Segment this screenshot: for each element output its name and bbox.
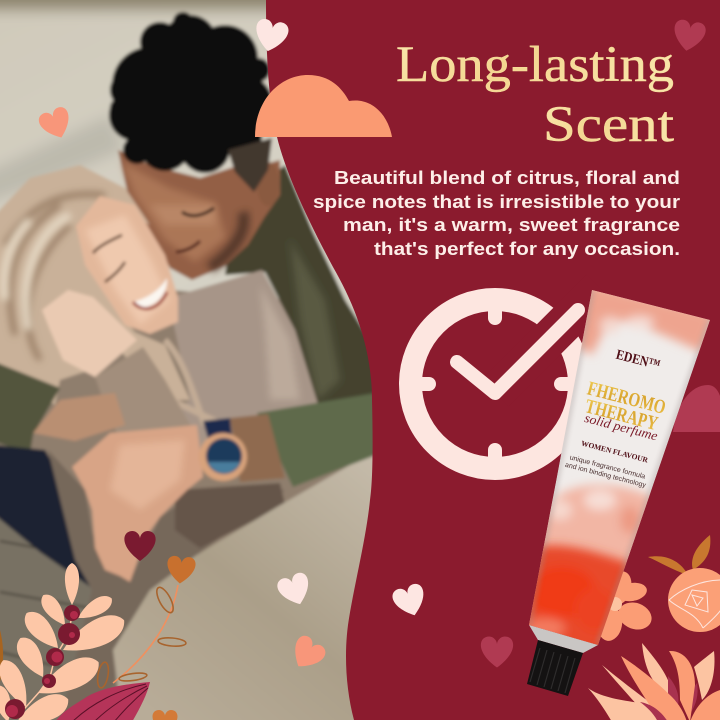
tube flavour: WOMEN FLAVOUR — [580, 439, 650, 465]
floral: bottom right plant — [588, 643, 720, 720]
icon: heart dark on hand — [124, 531, 156, 561]
floral: orange fruit — [648, 535, 720, 632]
description line 2: spice notes that is irresistible to your — [313, 191, 680, 212]
tube body — [529, 290, 710, 645]
tube subtitle: solid perfume — [583, 410, 660, 443]
tube red base — [529, 538, 628, 645]
description text — [313, 167, 680, 259]
photo: man's left forearm — [33, 393, 125, 441]
photo: knit sleeve — [95, 347, 192, 448]
tube name line 2: THERAPY — [583, 395, 660, 435]
tube edge shading — [529, 290, 710, 645]
icon: clock with check mark — [410, 288, 600, 468]
photo: woman's hand — [42, 290, 137, 377]
panel: crimson wave shape — [266, 0, 720, 720]
branch berries — [5, 605, 80, 719]
icon: cloud peach — [255, 75, 392, 137]
icon: cloud pale crimson right — [673, 385, 720, 432]
floral: bottom left outline stem — [96, 585, 186, 689]
photo: man's right forearm — [230, 414, 285, 482]
description line 3: man, it's a warm, sweet fragrance — [343, 214, 680, 235]
tube middle clouds — [525, 485, 655, 572]
stem line — [113, 585, 178, 683]
photo: sweater — [125, 270, 318, 455]
icon: heart cream on pants — [275, 571, 315, 609]
tube top clouds — [580, 290, 710, 358]
floral: bottom left berry branch — [0, 563, 130, 720]
photo: embracing couple — [0, 0, 400, 720]
plant accents back — [668, 676, 698, 714]
plant dark accent — [640, 702, 668, 720]
photo: clothing underlayer — [0, 290, 376, 560]
plant pale leaves back — [642, 643, 672, 697]
check mark cut-out — [495, 288, 600, 393]
flower petals — [595, 569, 655, 643]
tube neck — [529, 625, 598, 653]
tube name line 1: FHEROMO — [585, 378, 668, 419]
icon: heart pale crimson lower — [481, 636, 513, 668]
clock ring — [410, 300, 580, 468]
flower centre — [608, 597, 622, 611]
photo: blurred wall — [0, 0, 400, 720]
icon: heart orange bottom — [153, 710, 177, 720]
photo: jacket — [225, 165, 376, 410]
product: Eden tube — [527, 290, 710, 696]
tube brand: EDEN™ — [614, 348, 662, 374]
tube cap — [527, 640, 583, 696]
fruit rose lines — [669, 580, 720, 628]
photo: man's hand — [72, 425, 203, 582]
fruit leaves — [648, 535, 710, 575]
photo: wristwatch — [199, 418, 247, 481]
fruit body — [668, 568, 720, 632]
photo: man's left sleeve — [0, 362, 60, 453]
photo: man's face — [118, 150, 280, 280]
icon: heart cream top — [252, 17, 290, 55]
photo: skirt — [48, 450, 285, 720]
tube note line 2: and ion binding technology — [564, 462, 647, 489]
description line 4: that's perfect for any occasion. — [374, 238, 680, 259]
icon: heart coral on pants — [286, 633, 328, 675]
plant coral leaves — [669, 651, 695, 720]
title line 1: Long-lasting — [396, 37, 674, 93]
berry highlights — [6, 611, 78, 717]
photo: wooden floor — [0, 490, 145, 720]
floral: crimson leaf — [55, 682, 150, 720]
photo: pants — [113, 450, 376, 720]
tube product name — [583, 378, 668, 435]
icon: heart cream centre — [391, 582, 429, 620]
icon: heart orange on stem — [166, 555, 196, 585]
check mark — [457, 310, 578, 393]
clock ticks — [416, 305, 574, 463]
floral: brown leaf edge — [0, 620, 3, 682]
plant pale leaf front — [588, 688, 660, 720]
floral: peach flower behind tube — [595, 569, 655, 643]
icon: heart coral left — [37, 105, 75, 143]
photo: man's hair — [109, 12, 274, 192]
branch leaves — [0, 563, 130, 720]
tube note line 1: unique fragrance formula — [569, 454, 646, 481]
description line 1: Beautiful blend of citrus, floral and — [334, 167, 680, 188]
photo: man's right sleeve — [257, 393, 376, 487]
title — [396, 37, 674, 153]
photo: jeans — [0, 445, 105, 590]
icon: heart pale crimson top right — [671, 19, 707, 53]
title line 2: Scent — [543, 97, 674, 153]
outline leaves — [96, 585, 186, 689]
photo: woman's face — [76, 196, 178, 334]
photo: woman's hair — [0, 165, 230, 428]
branch stem — [15, 613, 72, 718]
